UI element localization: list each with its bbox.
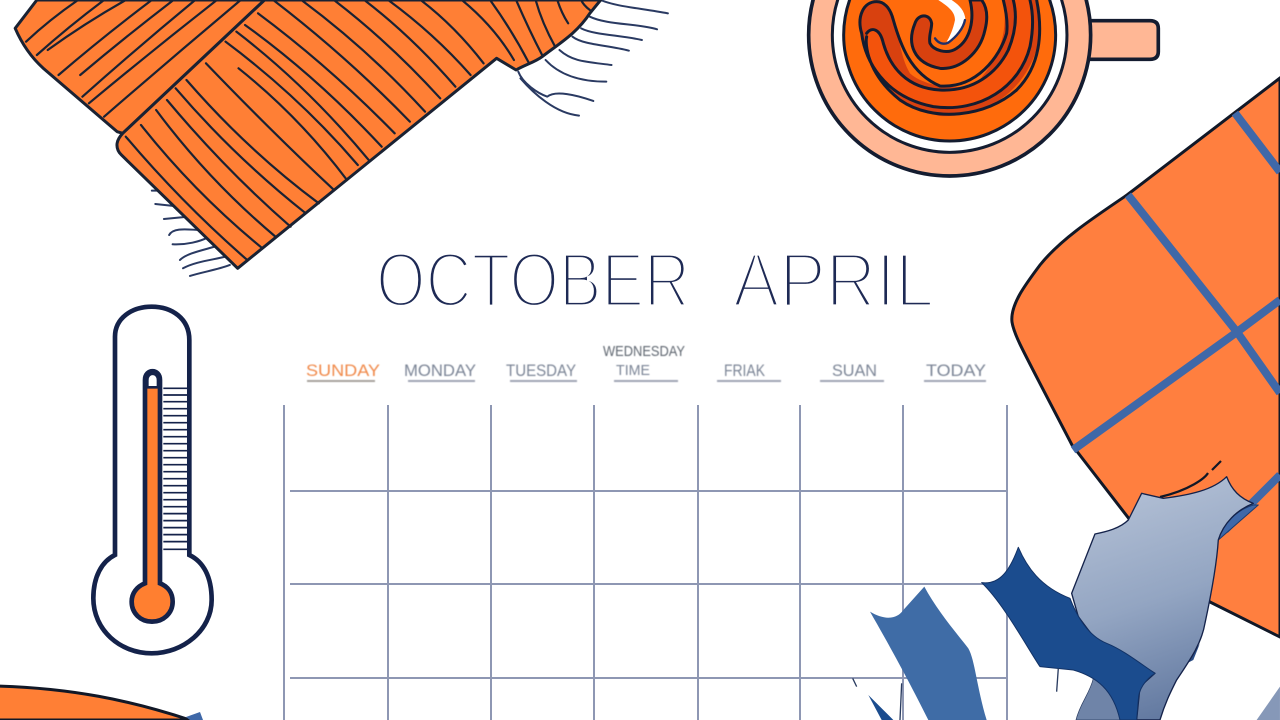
weekday headers <box>306 343 986 382</box>
header: day 6 <box>820 361 884 382</box>
icon: torn jacket pieces <box>853 477 1280 720</box>
scarf ribs <box>26 0 590 260</box>
scarf lower band <box>117 0 601 268</box>
header: day 2: MONDAY <box>404 361 476 380</box>
scarf fringe <box>152 0 668 276</box>
navy jacket piece <box>982 547 1155 720</box>
icon: coffee cup <box>809 0 1158 176</box>
header: day 6: SUAN <box>832 361 877 380</box>
thermometer body <box>93 307 212 653</box>
coffee <box>844 0 1056 141</box>
small blue shard right <box>1257 687 1280 720</box>
blue edge beside jacket <box>1218 505 1258 540</box>
blanket fold mark <box>1160 461 1221 497</box>
title: APRIL <box>733 238 934 324</box>
cup inner ring <box>832 0 1067 152</box>
coffee swirl <box>860 0 1040 116</box>
small navy accent <box>1187 643 1200 663</box>
header: day 4: TIME <box>616 362 650 379</box>
torn thread marks <box>853 668 1058 720</box>
icon: bottom-left orange object <box>0 686 203 720</box>
grey jacket piece <box>1072 477 1253 720</box>
milk streak <box>938 0 965 42</box>
header: day 4 <box>603 343 685 382</box>
cup rim <box>809 0 1091 176</box>
icon: plaid blanket <box>1012 78 1280 637</box>
lower grey piece <box>1076 678 1130 720</box>
scarf upper band <box>15 0 265 133</box>
blanket plaid lines <box>1073 113 1280 530</box>
header: day 7: TODAY <box>926 361 986 380</box>
header: day 1: SUNDAY <box>306 361 380 380</box>
header: day 5: FRIAK <box>724 361 766 380</box>
header: day 3: TUESDAY <box>506 361 576 380</box>
header: day 4: WEDNESDAY <box>603 343 685 360</box>
thermometer tube cap <box>147 374 158 387</box>
title <box>376 238 934 324</box>
calendar grid <box>284 405 1007 720</box>
title: OCTOBER <box>376 238 690 324</box>
icon: scarf <box>15 0 668 276</box>
icon: thermometer <box>93 307 212 653</box>
thermometer tube <box>132 371 173 622</box>
cup handle <box>1087 21 1158 59</box>
thermometer ticks <box>163 388 188 549</box>
small navy shard <box>868 695 893 720</box>
blue jacket piece <box>870 587 987 720</box>
